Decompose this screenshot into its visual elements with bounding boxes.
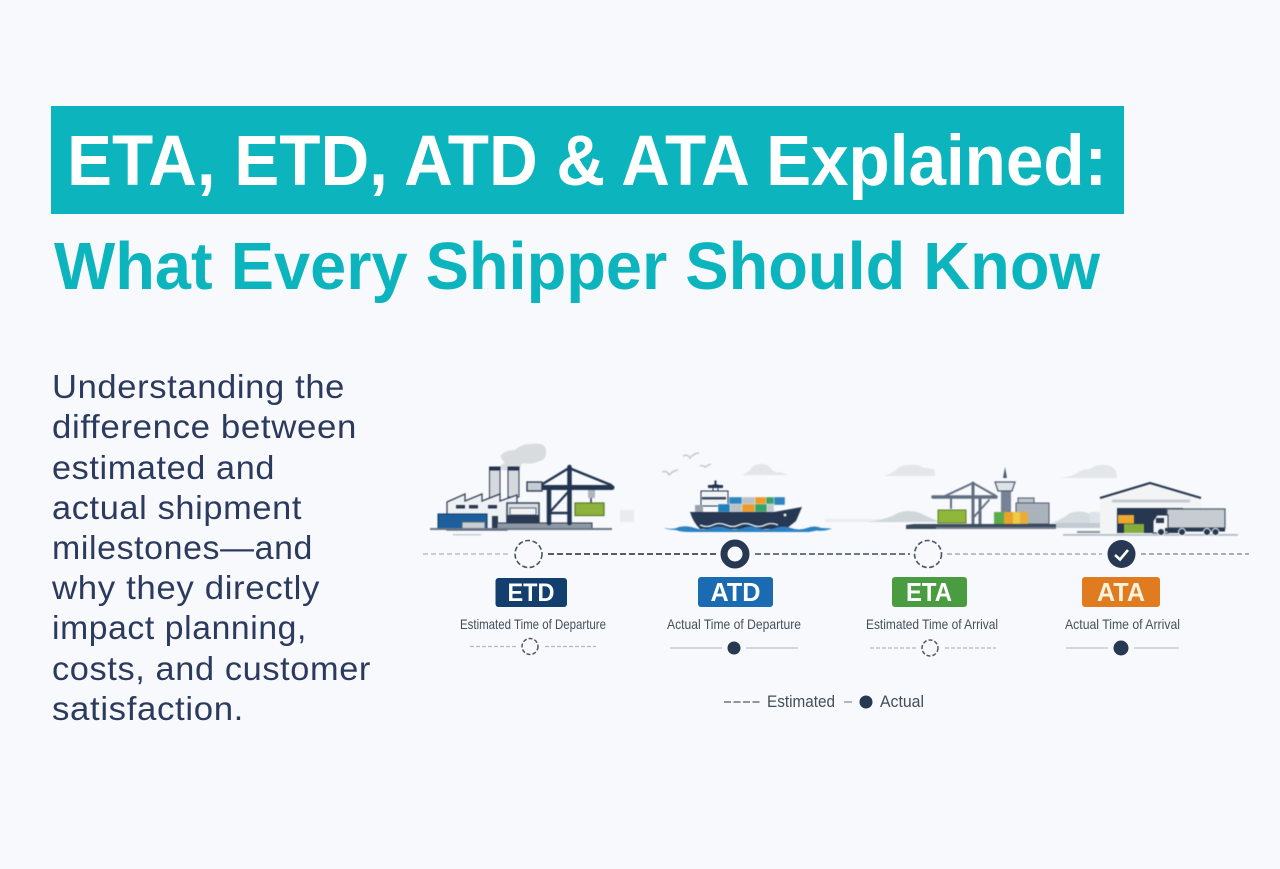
blue containers	[438, 514, 487, 530]
clouds	[884, 465, 935, 476]
intro paragraph: difference between	[52, 408, 357, 445]
port crane	[540, 467, 612, 523]
intro paragraph: why they directly	[51, 569, 320, 606]
legend	[724, 692, 924, 711]
intro paragraph: impact planning,	[52, 609, 307, 646]
ATD marker	[724, 543, 746, 565]
dock crane	[933, 483, 996, 524]
milestone: ETA	[866, 577, 998, 656]
control tower	[1003, 467, 1007, 478]
ATA badge	[1082, 577, 1160, 607]
title line 2: What Every Shipper Should Know	[54, 229, 1101, 304]
illustration: destination port	[868, 465, 1238, 536]
distant skyline	[620, 510, 634, 522]
control building	[507, 503, 539, 523]
cargo containers	[718, 497, 785, 512]
hanging green container	[575, 503, 604, 516]
legend actual dot	[860, 696, 872, 708]
ATA marker	[1108, 540, 1136, 568]
smoke cloud	[500, 444, 546, 470]
ETD marker	[515, 540, 542, 568]
ETA mini track	[870, 640, 996, 656]
cloud	[742, 464, 788, 475]
intro paragraph	[51, 368, 371, 727]
ATA mini track	[1066, 640, 1179, 656]
ATD mini track	[670, 642, 798, 654]
illustration: origin factory and port	[430, 444, 634, 535]
stacked containers	[994, 512, 1004, 524]
ETD mini track	[470, 638, 596, 654]
milestone: ATD: ATD	[710, 577, 760, 607]
ATD badge	[698, 577, 773, 607]
ETA label: Estimated Time of Arrival	[866, 616, 998, 632]
title band	[51, 106, 1124, 214]
quay	[906, 524, 1056, 529]
ship hull	[690, 507, 802, 529]
factory building	[447, 494, 517, 530]
legend actual label: Actual	[880, 692, 924, 711]
milestone: ETD	[460, 578, 606, 654]
hills	[868, 511, 940, 522]
illustration: container ship	[662, 453, 900, 532]
truck	[1167, 509, 1225, 528]
intro paragraph: estimated and	[52, 449, 275, 486]
green container	[938, 510, 966, 523]
ETD badge	[496, 578, 567, 607]
warehouse	[1100, 483, 1201, 533]
ATD label: Actual Time of Departure	[667, 616, 801, 632]
sea waves	[665, 526, 832, 532]
timeline dashes	[423, 553, 511, 555]
ETD label: Estimated Time of Departure	[460, 616, 606, 632]
ETA badge	[892, 577, 967, 607]
quay	[497, 523, 592, 529]
milestone: ATD	[667, 577, 801, 654]
ship bridge	[701, 481, 728, 506]
legend estimated label: Estimated	[767, 692, 835, 711]
milestone: ETA: ETA	[906, 577, 952, 607]
ATA label: Actual Time of Arrival	[1065, 616, 1180, 632]
milestone: ETD: ETD	[508, 579, 554, 607]
ETA marker	[914, 540, 942, 568]
birds	[662, 453, 711, 475]
legend estimated dashes	[724, 701, 760, 703]
title	[51, 106, 1124, 304]
intro paragraph: satisfaction.	[52, 690, 244, 727]
intro paragraph: milestones—and	[52, 529, 313, 566]
factory chimneys	[490, 467, 519, 500]
intro paragraph: Understanding the	[52, 368, 345, 405]
timeline	[423, 540, 1249, 568]
legend actual line	[844, 701, 852, 703]
terminal building	[1016, 503, 1049, 524]
milestone: ATA: ATA	[1097, 577, 1145, 607]
intro paragraph: costs, and customer	[52, 650, 371, 687]
intro paragraph: actual shipment	[52, 489, 302, 526]
title line 1: ETA, ETD, ATD & ATA Explained:	[67, 122, 1107, 201]
milestone: ATA	[1065, 577, 1180, 656]
